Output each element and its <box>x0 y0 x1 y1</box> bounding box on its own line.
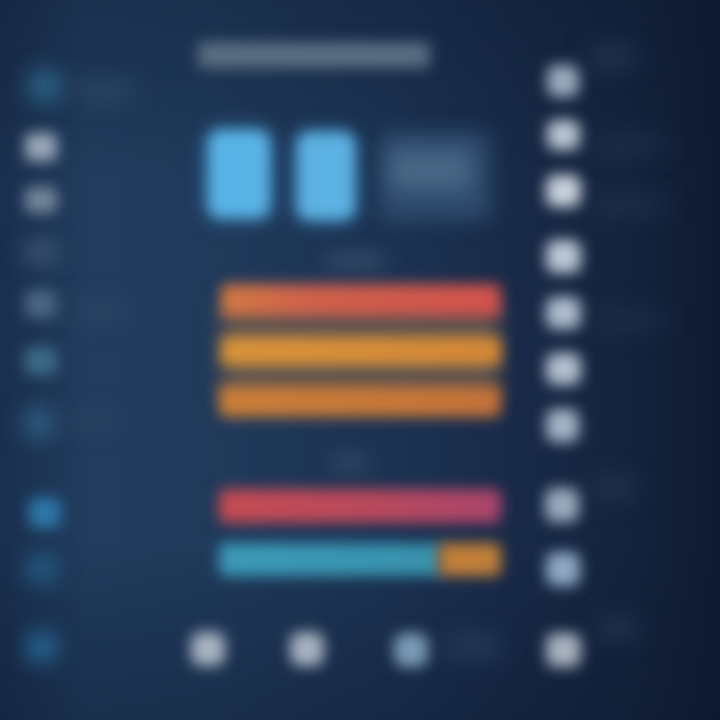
heading: lower section <box>330 458 370 468</box>
icon: left 7 <box>24 408 54 438</box>
bar: dark orange <box>219 385 501 417</box>
heading: bars section <box>325 256 385 266</box>
text block: right card text <box>390 150 470 190</box>
icon: left 3 <box>25 187 57 213</box>
card: middle blue <box>297 132 355 220</box>
icon: right 7 <box>546 409 579 442</box>
bar: red orange <box>221 284 501 317</box>
bar: teal segment <box>219 543 441 576</box>
text block: right label 4 <box>594 315 664 325</box>
text block: right label 2 <box>594 140 664 150</box>
bar: crimson <box>219 489 501 523</box>
icon: left 5 <box>25 290 57 318</box>
icon: right 6 <box>546 353 581 385</box>
icon: right 1 <box>547 65 579 97</box>
bar chart: lower bars <box>208 478 512 586</box>
panel: bottom icons <box>181 622 437 676</box>
band between bars <box>221 305 499 395</box>
icon: left top <box>29 70 61 102</box>
text block: label 1 <box>74 85 134 97</box>
icon: left 6 <box>25 347 57 375</box>
icon: right 4 <box>546 240 581 273</box>
bar: orange <box>221 336 501 366</box>
icon: right 9 <box>546 552 580 586</box>
text block: bottom label <box>445 640 500 652</box>
panel: faint right labels <box>594 42 632 638</box>
text block: label 3 <box>70 415 120 425</box>
panel: left icon column <box>16 62 69 672</box>
icon: left 2 <box>25 133 57 161</box>
card: right muted <box>380 132 490 220</box>
icon: left 10 <box>27 632 57 662</box>
icon: bottom 3 <box>394 633 428 667</box>
icon: right 2 <box>547 120 580 150</box>
card: left blue <box>208 130 270 218</box>
text block: right label 6 <box>598 620 638 636</box>
icon: right 3 <box>546 175 581 207</box>
icon: bottom 2 <box>290 632 324 666</box>
icon: left 4 <box>25 240 57 264</box>
icon: bottom 1 <box>191 632 225 666</box>
icon: left 8 <box>29 498 61 528</box>
bar: orange segment <box>439 543 501 576</box>
icon: left 9 <box>27 555 57 583</box>
text block: right label 5 <box>594 480 634 494</box>
icon: right 5 <box>546 297 581 329</box>
icon: right 8 <box>545 488 579 522</box>
text block: label 2 <box>70 305 130 315</box>
panel: right icon column <box>535 55 592 678</box>
bar chart: upper bars <box>208 273 514 428</box>
panel: top cards <box>194 116 498 234</box>
text block: right label 1 <box>590 50 635 64</box>
icon: right 10 <box>546 633 581 667</box>
panel: faint left labels <box>92 84 117 98</box>
title <box>198 42 430 68</box>
text block: right label 3 <box>594 200 664 210</box>
